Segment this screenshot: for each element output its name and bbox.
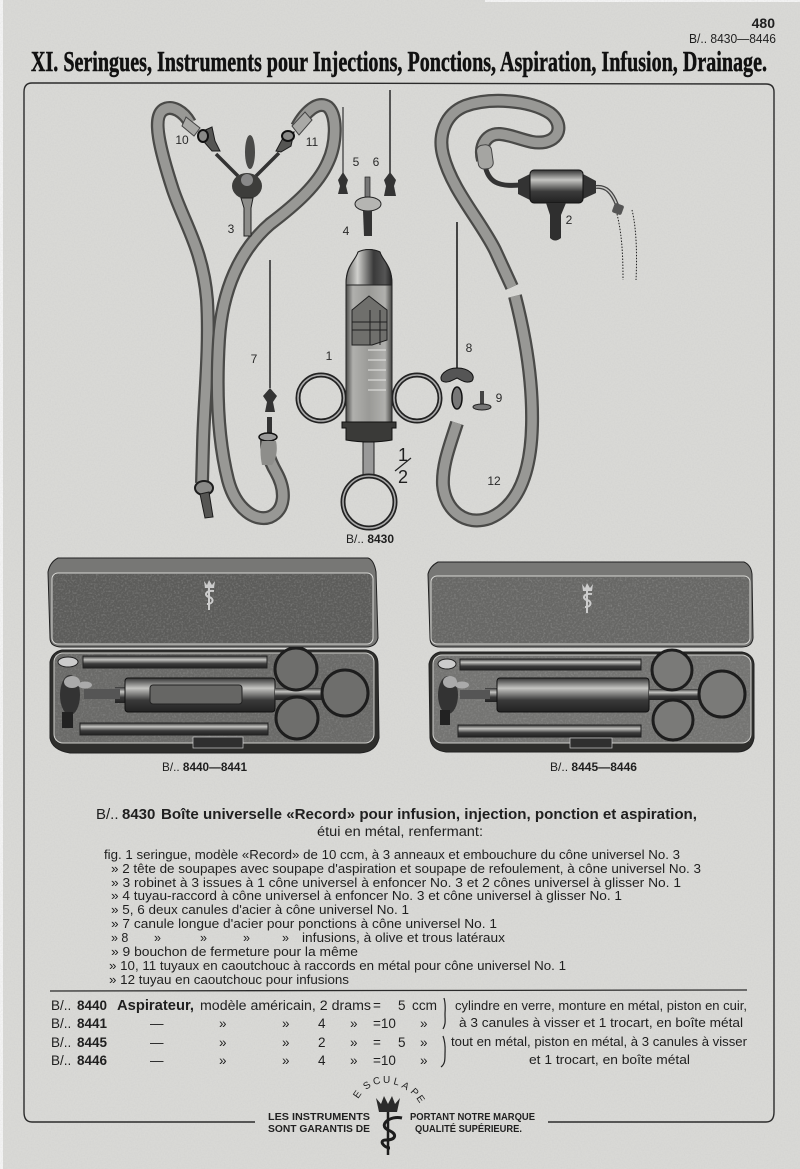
trademark emblem [351, 1075, 427, 1155]
tube 11 [218, 105, 335, 518]
contents list: » 7 canule longue d'acier pour ponctions à cône universel No. 1 [111, 917, 497, 931]
upper tube [58, 656, 267, 668]
brace upper [443, 998, 445, 1029]
part numbers [175, 133, 573, 488]
contents list: » [154, 931, 161, 945]
row 8445: » [350, 1035, 358, 1050]
tube 12 upper part [441, 101, 558, 287]
row 8441: 8441 [77, 1016, 108, 1031]
tube 12 lower part [443, 296, 532, 520]
arc text Esculape [351, 1075, 427, 1105]
table rule [50, 990, 747, 991]
row 8446: 8446 [77, 1053, 108, 1068]
part numbers: 12 [487, 474, 501, 488]
finger ring left [298, 375, 344, 421]
caption case right: B/.. 8445—8446 [550, 760, 637, 774]
fig. 8 infusion cannula [441, 222, 473, 409]
syringe [115, 678, 335, 712]
row 8441: » [219, 1016, 227, 1031]
row 8441: » [282, 1016, 290, 1031]
scale one half: 1 [398, 445, 408, 465]
fig. 1 syringe [298, 250, 440, 528]
row 8440: modèle américain, 2 drams [200, 998, 371, 1013]
row 8440: Aspirateur, [117, 997, 194, 1014]
contents list: » 4 tuyau-raccord à cône universel à enfoncer No. 3 et cône universel à glisser No. 1 [111, 889, 622, 903]
row 8440 [51, 997, 747, 1014]
fig. 9 closing plug [473, 391, 491, 410]
part numbers: 10 [175, 133, 189, 147]
contents list: » [243, 931, 250, 945]
row 8445: tout en métal, piston en métal, à 3 canules à visser [451, 1035, 747, 1049]
part numbers: 8 [466, 341, 473, 355]
lid [48, 558, 378, 647]
case B/..8440-8441 [48, 558, 379, 753]
description heading: étui en métal, renfermant: [317, 824, 483, 839]
row 8440: B/.. [51, 998, 71, 1013]
scale one half: 2 [398, 467, 408, 487]
scale one half [395, 445, 411, 487]
fig. 5 cannula [338, 107, 348, 194]
lower tube [80, 723, 268, 735]
guarantee text right [410, 1111, 535, 1135]
part numbers: 6 [373, 155, 380, 169]
piston and scale [352, 296, 387, 390]
contents list: » 2 tête de soupapes avec soupape d'aspiration et soupape de refoulement, à cône universel No. 3 [111, 862, 701, 876]
row 8446: » [350, 1053, 358, 1068]
row 8446: 4 [318, 1053, 326, 1068]
row 8446: » [282, 1053, 290, 1068]
guarantee text right: QUALITÉ SUPÉRIEURE. [415, 1122, 522, 1135]
row 8441: » [350, 1016, 358, 1031]
row 8446: — [150, 1053, 164, 1068]
row 8441: =10 [373, 1016, 396, 1031]
row 8441: 4 [318, 1016, 326, 1031]
row 8440: = [373, 998, 381, 1013]
row 8445: 5 [398, 1035, 406, 1050]
tray [429, 652, 754, 752]
caption case left: B/.. 8440—8441 [162, 760, 247, 774]
part numbers: 1 [326, 349, 333, 363]
contents list: » 8 [111, 931, 128, 945]
fig. 2 valve head [476, 144, 637, 280]
upper tube [438, 659, 641, 670]
case B/..8445-8446 [428, 562, 754, 752]
row 8441 [51, 1016, 743, 1031]
arc text Esculape: A [400, 1080, 411, 1093]
tray [50, 650, 379, 753]
arc text Esculape: P [408, 1086, 421, 1099]
part numbers: 11 [306, 135, 319, 149]
contents list: » [282, 931, 289, 945]
arc text Esculape: S [361, 1079, 373, 1092]
arc text Esculape: E [351, 1089, 364, 1101]
contents list: » [200, 931, 207, 945]
contents list: fig. 1 seringue, modèle «Record» de 10 ccm, à 3 anneaux et embouchure du cône universel No. 3 [104, 848, 680, 862]
row 8445: 2 [318, 1035, 326, 1050]
staff with serpent [382, 1112, 402, 1155]
fig. 4 connector [355, 177, 381, 236]
row 8446: » [219, 1053, 227, 1068]
contents list: » 10, 11 tuyaux en caoutchouc à raccords en métal pour cône universel No. 1 [109, 959, 566, 973]
thumb ring [343, 476, 395, 528]
part numbers: 2 [566, 213, 573, 227]
metal cap [346, 250, 392, 285]
stopcock [60, 675, 120, 728]
contents list: » 3 robinet à 3 issues à 1 cône universel à enfoncer No. 3 et 2 cônes universel à glisser No. 1 [111, 876, 681, 890]
row 8446 [51, 1053, 690, 1068]
row 8446: B/.. [51, 1053, 71, 1068]
arc text Esculape: C [372, 1075, 382, 1088]
row 8440: 5 [398, 998, 406, 1013]
syringe [485, 678, 704, 712]
rings [652, 650, 745, 740]
arc text Esculape: L [392, 1076, 401, 1088]
contents list: infusions, à olive et trous latéraux [302, 931, 506, 945]
rings [275, 648, 368, 739]
row 8446: =10 [373, 1053, 396, 1068]
row 8446: » [420, 1053, 428, 1068]
part numbers: 5 [353, 155, 360, 169]
barrel collar [342, 422, 396, 442]
row 8440: ccm [412, 998, 437, 1013]
guarantee text left [268, 1111, 370, 1135]
barrel [346, 250, 392, 422]
part numbers: 3 [228, 222, 235, 236]
part numbers: 9 [496, 391, 503, 405]
reference range: B/.. 8430—8446 [689, 32, 776, 46]
caption B/..8430: B/.. 8430 [346, 532, 394, 546]
fig. 7 long cannula [259, 260, 277, 465]
row 8445: 8445 [77, 1035, 108, 1050]
description heading [96, 806, 697, 839]
arc text Esculape: E [414, 1093, 427, 1105]
clasp [193, 737, 243, 748]
contents list: » 5, 6 deux canules d'acier à cône universel No. 1 [111, 903, 409, 917]
row 8440: cylindre en verre, monture en métal, piston en cuir, [455, 999, 747, 1013]
emblem [582, 583, 593, 613]
lid [428, 562, 753, 647]
row 8445: — [150, 1035, 164, 1050]
row 8445: = [373, 1035, 381, 1050]
row 8440: 8440 [77, 998, 107, 1013]
row 8441: B/.. [51, 1016, 71, 1031]
tube 10 [158, 108, 213, 518]
fig. 6 cannula [384, 90, 396, 196]
description heading: Boîte universelle «Record» pour infusion, injection, ponction et aspiration, [161, 806, 697, 823]
row 8441: — [150, 1016, 164, 1031]
row 8446: et 1 trocart, en boîte métal [529, 1053, 690, 1067]
clasp [570, 738, 612, 748]
guarantee text left: LES INSTRUMENTS [268, 1111, 370, 1123]
row 8445 [51, 1035, 747, 1050]
row 8441: à 3 canules à visser et 1 trocart, en boîte métal [459, 1016, 743, 1030]
row 8445: » [219, 1035, 227, 1050]
row 8445: » [282, 1035, 290, 1050]
guarantee text right: PORTANT NOTRE MARQUE [410, 1111, 535, 1123]
plunger rod [363, 442, 374, 476]
price table [51, 997, 747, 1068]
description heading: 8430 [122, 806, 155, 823]
brace lower [441, 1036, 445, 1067]
arc text Esculape: U [383, 1075, 390, 1086]
contents list [104, 848, 701, 987]
fig. 3 stopcock with connectors [198, 127, 294, 236]
part numbers: 4 [343, 224, 350, 238]
figure: instruments B/..8430 [158, 90, 637, 528]
contents list: » 9 bouchon de fermeture pour la même [111, 945, 358, 959]
crown [376, 1096, 400, 1112]
contents list: » 12 tuyau en caoutchouc pour infusions [109, 973, 349, 987]
page number: 480 [752, 15, 775, 31]
row 8441: » [420, 1016, 428, 1031]
row 8445: » [420, 1035, 428, 1050]
description heading: B/.. [96, 806, 119, 823]
stopcock [438, 676, 490, 725]
emblem [204, 580, 215, 610]
lower tube [458, 725, 641, 737]
part numbers: 7 [251, 352, 258, 366]
row 8445: B/.. [51, 1035, 71, 1050]
finger ring right [394, 375, 440, 421]
guarantee text left: SONT GARANTIS DE [268, 1123, 370, 1135]
